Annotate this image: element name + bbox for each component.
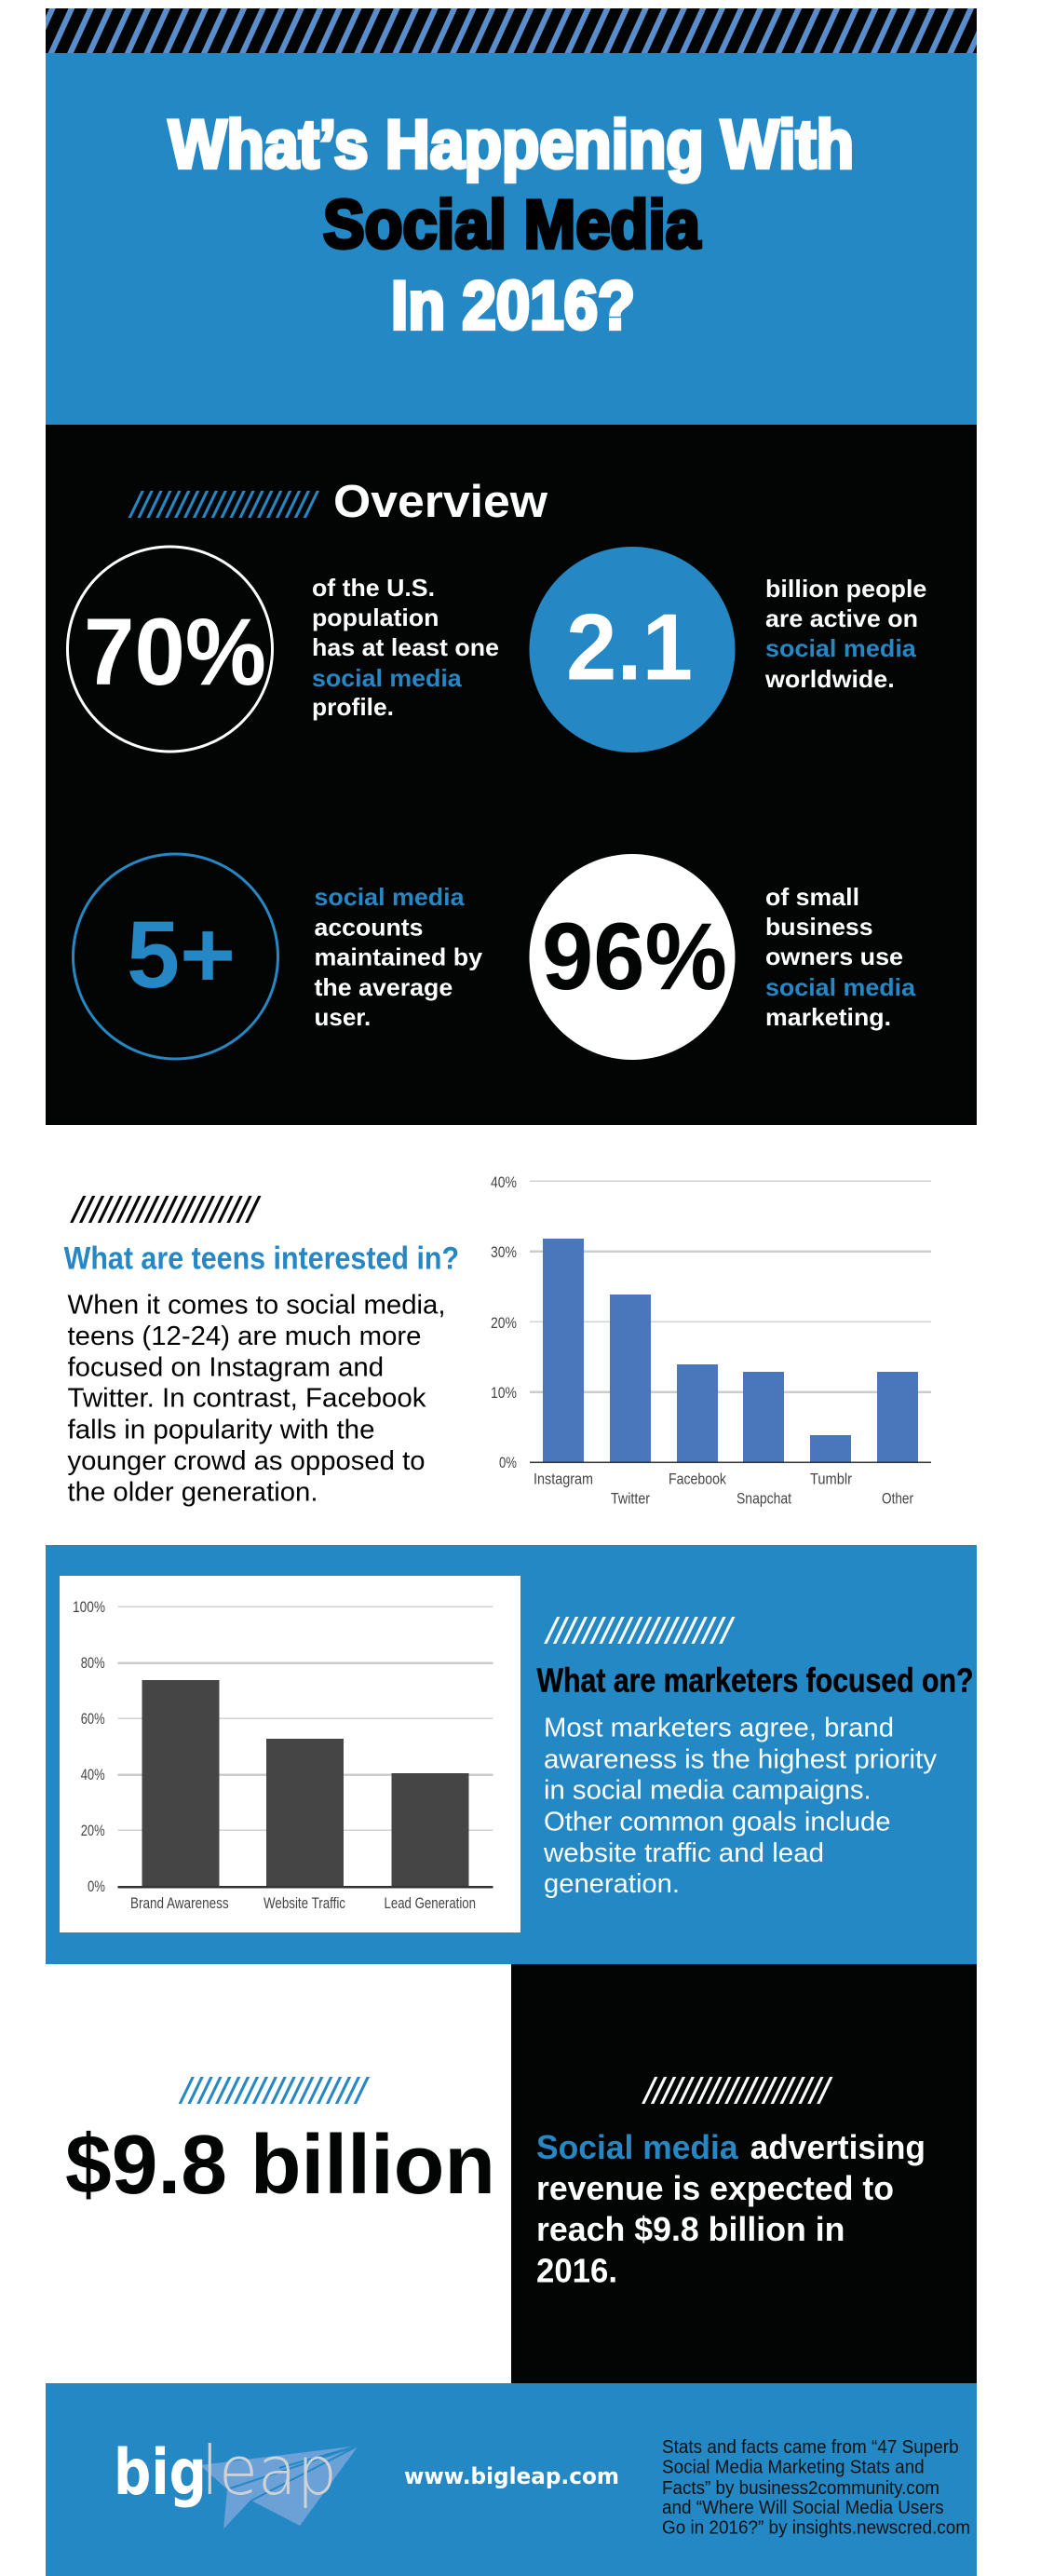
stat text: 96% — [765, 883, 916, 1031]
text block: teens: younger crowd as opposed to — [67, 1446, 426, 1476]
stat text: 96%: business — [765, 913, 873, 941]
bar chart: teens platforms: Facebook — [669, 1470, 726, 1487]
stat: 70%: 70% — [84, 599, 266, 705]
stat: 5+: 5+ — [127, 902, 236, 1008]
source credits: Stats and facts came from “47 Superb — [662, 2437, 959, 2458]
bar: Brand Awareness — [142, 1680, 220, 1887]
stat text: 70% — [312, 574, 499, 721]
chart card with bar chart: marketers goals: 80% — [81, 1654, 105, 1672]
bar: Twitter — [610, 1295, 651, 1462]
stat text: 70%: population — [312, 603, 439, 631]
title line 2: Social Media — [323, 187, 701, 263]
stat text: 2.1: are active on — [765, 604, 918, 632]
decorative hatch: revenue figure — [179, 2077, 371, 2104]
decorative hatch: overview — [128, 491, 320, 518]
stat text: 96%: owners use — [765, 942, 903, 970]
bar: Lead Generation — [391, 1773, 469, 1887]
heading: overview: Overview — [333, 477, 548, 527]
chart card with bar chart: marketers goals: 0% — [88, 1878, 105, 1895]
bar chart: teens platforms: Twitter — [611, 1490, 650, 1508]
text block: revenue — [536, 2128, 926, 2289]
bar chart: teens platforms — [491, 1173, 931, 1508]
text block: teens — [67, 1291, 445, 1508]
text block: teens: When it comes to social media, — [67, 1291, 445, 1321]
text block: teens: focused on Instagram and — [67, 1353, 384, 1383]
chart card with bar chart: marketers goals: 20% — [81, 1822, 105, 1839]
decorative hatch: marketers — [544, 1617, 736, 1644]
chart card with bar chart: marketers goals: Lead Generation — [384, 1894, 476, 1912]
stat text: 2.1: billion people — [765, 575, 926, 603]
bar: Tumblr — [810, 1435, 851, 1462]
text block: marketers — [543, 1713, 937, 1899]
stat text: 2.1: worldwide. — [764, 665, 895, 693]
stat: 2.1: 2.1 — [566, 596, 693, 700]
source credits — [662, 2437, 970, 2539]
decorative hatch: revenue text — [642, 2077, 834, 2104]
panel: revenue text — [511, 1964, 977, 2383]
chart card with bar chart: marketers goals: 100% — [73, 1598, 105, 1616]
chart card with bar chart: marketers goals: 60% — [81, 1710, 105, 1728]
source credits: and “Where Will Social Media Users — [662, 2498, 944, 2518]
decorative hatch: teens — [70, 1196, 263, 1223]
stat text: 5+: social media — [315, 883, 465, 911]
stat text: 5+: user. — [315, 1003, 371, 1031]
bar: Instagram — [543, 1239, 584, 1462]
text block: teens: the older generation. — [67, 1478, 318, 1508]
stat text: 70%: social media — [312, 664, 462, 692]
text block: marketers: Other common goals include — [544, 1808, 891, 1837]
chart card with bar chart: marketers goals: Website Traffic — [264, 1894, 345, 1912]
stat text: 2.1 — [764, 575, 926, 693]
source credits: Social Media Marketing Stats and — [662, 2458, 925, 2478]
stat: 2.1 — [529, 547, 736, 752]
bar chart: teens platforms: Tumblr — [810, 1470, 852, 1487]
text block: revenue: Social media — [536, 2128, 739, 2166]
stat: 70% — [67, 547, 272, 752]
text block: revenue: revenue is expected to — [536, 2169, 894, 2207]
bar chart: teens platforms: 20% — [491, 1314, 517, 1332]
title line 3: In 2016? — [391, 268, 635, 344]
text block: teens: Twitter. In contrast, Facebook — [67, 1384, 426, 1414]
text block: teens: teens (12-24) are much more — [67, 1322, 422, 1351]
logo: bigleap: leap — [201, 2432, 337, 2510]
stat text: 96%: marketing. — [765, 1003, 891, 1031]
panel: teens — [46, 1125, 977, 1545]
bar: Other — [877, 1372, 918, 1462]
bar chart: teens platforms: 40% — [491, 1173, 517, 1191]
big number: $9.8 billion: $9.8 billion — [65, 2119, 495, 2212]
text block: revenue: reach $9.8 billion in — [536, 2210, 845, 2248]
bar chart: teens platforms: 10% — [491, 1384, 517, 1402]
stat text: 5+ — [315, 883, 483, 1031]
text block: marketers: website traffic and lead — [543, 1838, 824, 1868]
bar chart: teens platforms: Other — [882, 1490, 913, 1508]
stat: 5+ — [73, 854, 277, 1059]
stat text: 96%: of small — [765, 883, 859, 911]
bar chart: teens platforms: 0% — [499, 1454, 517, 1471]
bar chart: teens platforms: 30% — [491, 1243, 517, 1261]
stat text: 5+: accounts — [315, 913, 423, 941]
website url: www.bigleap.com — [404, 2463, 619, 2489]
text block: marketers: in social media campaigns. — [544, 1776, 872, 1806]
text block: marketers: awareness is the highest priority — [544, 1744, 937, 1774]
panel: marketers — [46, 1545, 977, 1964]
panel: footer — [46, 2383, 977, 2576]
bar chart: teens platforms: Instagram — [534, 1470, 593, 1487]
stat text: 96%: social media — [765, 973, 916, 1001]
heading: marketers: What are marketers focused on? — [536, 1661, 974, 1700]
text block: marketers: generation. — [544, 1869, 680, 1899]
chart card with bar chart: marketers goals — [60, 1576, 520, 1932]
title line 1: What’s Happening With — [169, 107, 854, 183]
text block: marketers: Most marketers agree, brand — [544, 1713, 894, 1742]
chart card with bar chart: marketers goals: 40% — [81, 1766, 105, 1783]
panel: striped top band — [46, 8, 977, 53]
stat text: 2.1: social media — [765, 634, 916, 662]
panel: overview — [46, 425, 977, 1125]
stat text: 70%: has at least one — [312, 633, 499, 661]
bar: Website Traffic — [266, 1739, 344, 1887]
source credits: Go in 2016?” by insights.newscred.com — [662, 2518, 970, 2539]
stat text: 5+: maintained by — [315, 942, 483, 970]
logo: bigleap — [114, 2432, 358, 2530]
stat text: 5+: the average — [315, 973, 453, 1001]
panel: revenue figure — [46, 1964, 511, 2383]
chart card with bar chart: marketers goals: Brand Awareness — [130, 1894, 229, 1912]
stat text: 70%: of the U.S. — [312, 574, 435, 602]
text block: revenue: 2016. — [536, 2252, 617, 2289]
bar: Facebook — [677, 1364, 718, 1462]
heading: teens: What are teens interested in? — [64, 1241, 459, 1276]
text block: revenue: advertising — [750, 2128, 926, 2166]
stat: 96% — [529, 854, 736, 1060]
bar: Snapchat — [743, 1372, 784, 1462]
icon: paper plane — [200, 2446, 358, 2530]
panel: title — [46, 53, 977, 425]
source credits: Facts” by business2community.com — [662, 2478, 939, 2499]
logo: bigleap: big — [114, 2436, 207, 2510]
stat: 96%: 96% — [542, 903, 727, 1010]
text block: teens: falls in popularity with the — [67, 1416, 375, 1445]
bar chart: teens platforms: Snapchat — [736, 1490, 791, 1508]
stat text: 70%: profile. — [312, 693, 394, 721]
